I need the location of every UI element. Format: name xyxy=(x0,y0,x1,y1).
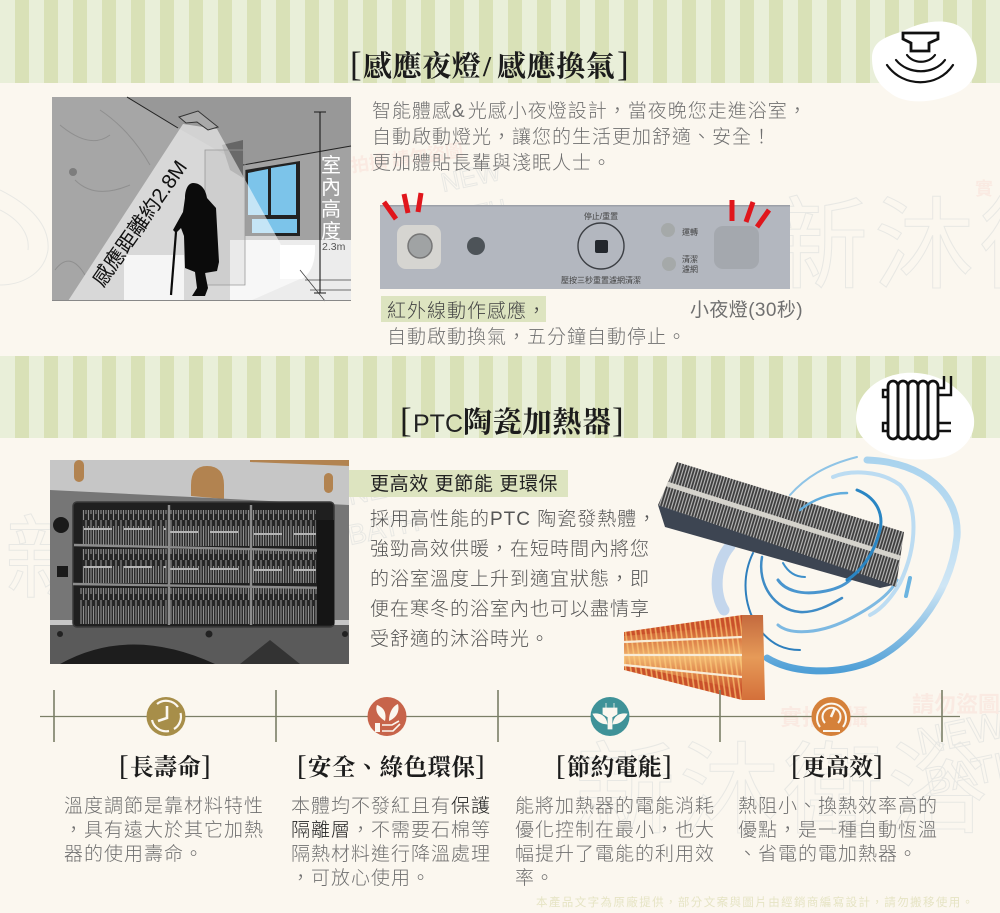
icon: sensor light xyxy=(872,22,977,101)
graphic: ceramic heater element orange xyxy=(624,615,765,700)
text block: PTC description: 便在寒冬的浴室內也可以盡情享 xyxy=(370,598,650,620)
text block: efficiency: 優點，是一種自動恆溫 xyxy=(738,819,938,841)
text block: safety xyxy=(291,795,491,889)
heading: PTC section: 陶瓷加熱器 xyxy=(463,406,612,439)
text block: infrared xyxy=(387,299,687,348)
text block: long life: 器的使用壽命。 xyxy=(64,843,204,865)
band: top stripes xyxy=(0,0,1000,83)
text block: infrared: 自動啟動換氣，五分鐘自動停止。 xyxy=(387,326,687,348)
label: indoor height: 度 xyxy=(321,220,341,243)
heading: long life: [ xyxy=(119,750,129,782)
label: indoor height xyxy=(321,154,341,243)
band: middle stripes xyxy=(0,356,1000,438)
watermarks: BATH xyxy=(345,505,422,551)
text block: safety: 本體均不發紅且有保護 xyxy=(291,795,491,817)
label: indoor height: 室 xyxy=(321,154,341,177)
text block: long life: 溫度調節是靠材料特性 xyxy=(64,795,264,817)
heading: energy: ] xyxy=(662,750,672,782)
text block: safety: ，可放心使用。 xyxy=(291,867,431,889)
graphic: air swirl back arcs xyxy=(717,457,957,671)
heading: safety: ] xyxy=(475,750,485,782)
text block: long life: ，具有遠大於其它加熱 xyxy=(64,819,264,841)
heading: energy: 節約電能 xyxy=(567,754,662,781)
heading: sensor section: ] xyxy=(617,45,629,84)
label: night light: 小夜燈(30秒) xyxy=(690,299,803,321)
icon: long life xyxy=(146,697,186,736)
text block: PTC description: 的浴室溫度上升到適宜狀態，即 xyxy=(370,568,650,590)
text block: infrared: 紅外線動作感應， xyxy=(387,299,547,322)
text block: energy: 率。 xyxy=(515,867,555,889)
text block: safety: 隔離層，不需要石棉等 xyxy=(291,819,491,841)
icon: green safety xyxy=(368,697,406,736)
text block: PTC description: 受舒適的沐浴時光。 xyxy=(370,628,550,650)
red marks xyxy=(384,193,769,227)
heading: PTC section: [ xyxy=(400,401,412,440)
heading: PTC section: PTC xyxy=(413,410,463,438)
icon: high efficiency xyxy=(812,697,850,736)
photo: control panel: 壓按三秒重置濾網清潔 xyxy=(561,275,641,285)
night light xyxy=(714,226,759,269)
heading: sensor section: / xyxy=(482,51,492,83)
heading: efficiency: [ xyxy=(791,750,801,782)
watermarks xyxy=(0,140,1000,847)
graphic: ceramic heater element grey xyxy=(658,462,904,588)
label: height value: 2.3m xyxy=(322,241,346,253)
elderly person silhouette xyxy=(173,183,219,296)
text block: PTC description: 強勁高效供暖，在短時間內將您 xyxy=(370,538,650,560)
watermarks: 實拍拍攝 xyxy=(780,705,868,730)
photo: control panel xyxy=(380,193,790,289)
heading: safety: 安全、綠色環保 xyxy=(308,754,476,781)
watermarks: BATH xyxy=(443,195,509,234)
watermarks: 實 xyxy=(975,178,993,199)
watermarks: 新沐衛浴 xyxy=(575,735,991,847)
text block: sensor description: 自動啟動燈光，讓您的生活更加舒適、安全！ xyxy=(372,126,772,148)
watermarks: 請勿盜圖 xyxy=(912,692,1000,717)
watermarks: NEW xyxy=(438,156,504,198)
text block: efficiency: 、省電的電加熱器。 xyxy=(738,843,918,865)
text block: sensor description xyxy=(372,100,808,174)
text block: energy: 幅提升了電能的利用效 xyxy=(515,843,715,865)
text block: long life xyxy=(64,795,264,865)
label: sensing distance: 感應距離約2.8M xyxy=(87,156,192,291)
light cone xyxy=(68,124,300,301)
height marker xyxy=(314,112,326,293)
callout: infrared highlight xyxy=(381,296,546,322)
watermarks: 拍攝 請勿盜圖 xyxy=(350,140,464,176)
text block: safety: 隔熱材料進行降溫處理 xyxy=(291,843,491,865)
heading: sensor section: [ xyxy=(350,45,362,84)
heading: long life: 長壽命 xyxy=(130,754,201,781)
stop button xyxy=(578,223,624,269)
photo: bathroom sensing diagram xyxy=(52,97,351,301)
text block: sensor description: 智能體感&光感小夜燈設計，當夜晚您走進浴室， xyxy=(372,100,808,122)
label: indoor height: 高 xyxy=(321,198,341,221)
text block: energy: 能將加熱器的電能消耗 xyxy=(515,795,715,817)
heading: PTC section: ] xyxy=(612,401,624,440)
ceiling vent xyxy=(179,111,218,130)
text block: PTC description: 採用高性能的PTC 陶瓷發熱體， xyxy=(370,508,657,530)
graphic: air swirl front arcs xyxy=(800,490,881,580)
photo: heater unit xyxy=(50,460,349,664)
subheading: efficiency tagline: 更高效 更節能 更環保 xyxy=(370,473,558,495)
text block: energy xyxy=(515,795,715,889)
text block: efficiency: 熱阻小、換熱效率高的 xyxy=(738,795,938,817)
icon: energy saving xyxy=(590,697,630,736)
sensor module xyxy=(397,225,441,269)
text block: PTC description xyxy=(370,508,657,650)
text block: efficiency xyxy=(738,795,938,865)
heading: sensor section: 感應夜燈 xyxy=(363,50,481,83)
photo: control panel: 清潔 xyxy=(682,254,698,264)
watermarks: 新 xyxy=(5,510,95,610)
heading: long life: ] xyxy=(201,750,211,782)
callout: higher efficiency xyxy=(349,470,568,497)
photo: control panel: 停止/重置 xyxy=(584,211,618,221)
photo: control panel: 濾網 xyxy=(682,264,698,274)
icon: radiator xyxy=(856,373,974,460)
text block: energy: 優化控制在最小，也大 xyxy=(515,819,715,841)
heading: sensor section: 感應換氣 xyxy=(497,50,615,83)
watermarks: NEW xyxy=(345,467,416,511)
heading: energy: [ xyxy=(556,750,566,782)
footer note: 本產品文字為原廠提供，部分文案與圖片由經銷商編寫設計，請勿搬移使用。 xyxy=(536,895,975,909)
heading: efficiency: 更高效 xyxy=(802,754,873,781)
timeline xyxy=(40,690,960,742)
label: indoor height: 內 xyxy=(321,177,341,199)
text block: sensor description: 更加體貼長輩與淺眠人士。 xyxy=(372,152,612,174)
photo: control panel: 運轉 xyxy=(682,227,698,237)
heading: safety: [ xyxy=(297,750,307,782)
heading: efficiency: ] xyxy=(873,750,883,782)
window xyxy=(245,161,300,236)
bathtub xyxy=(280,245,315,279)
